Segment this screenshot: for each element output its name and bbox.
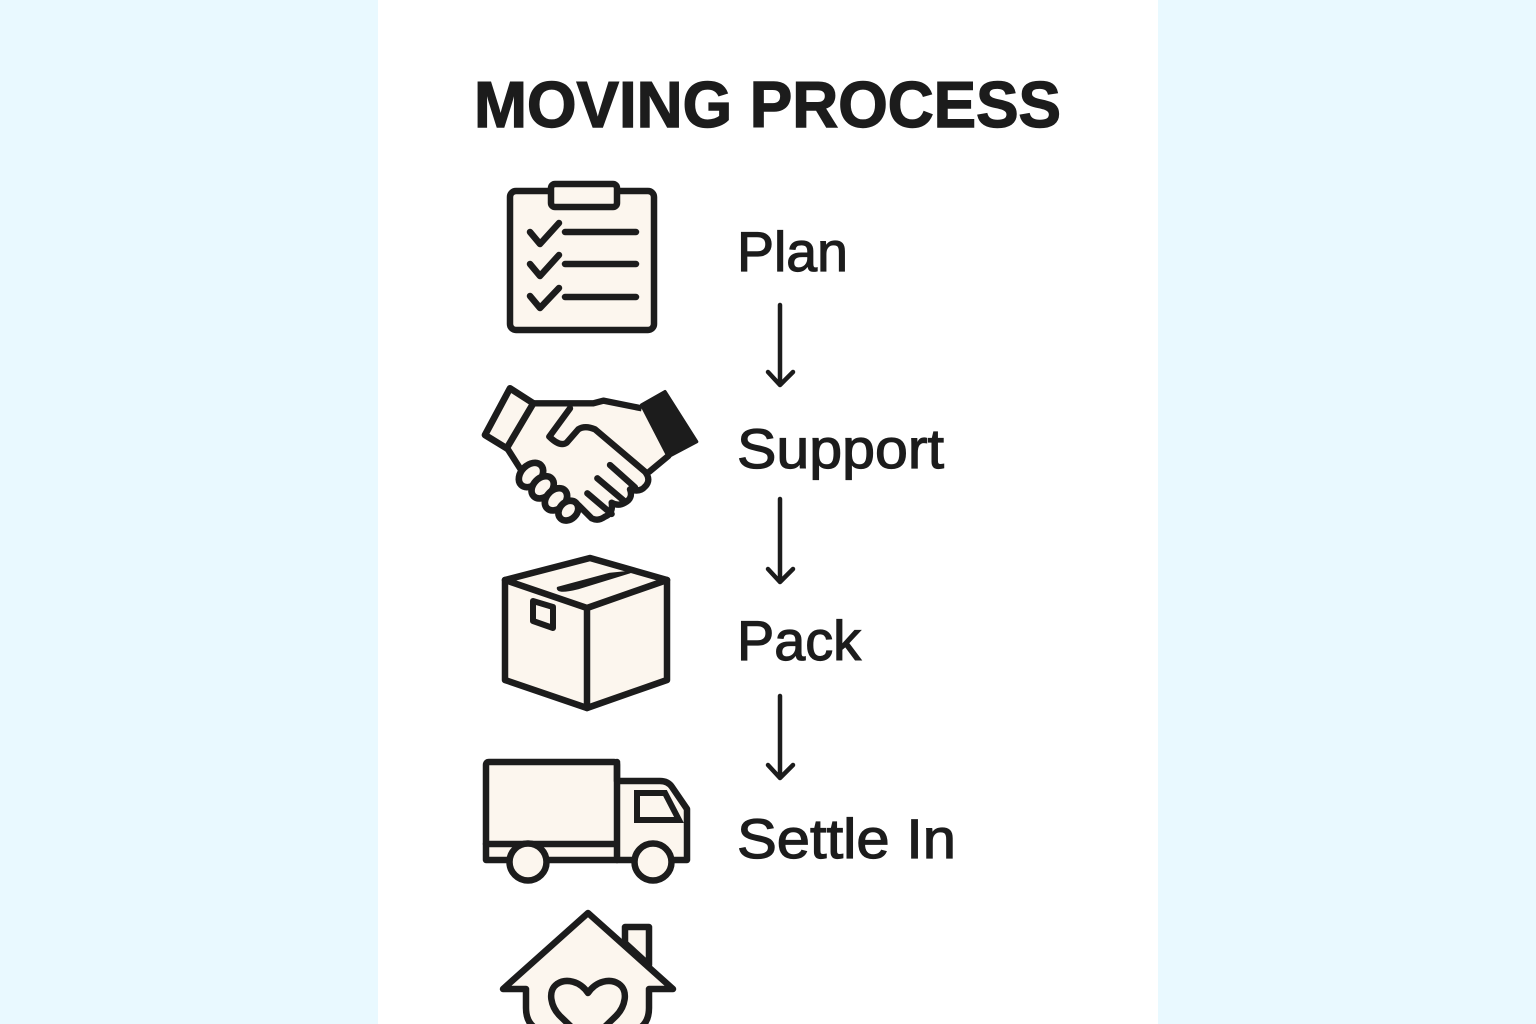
arrow: Plan to Support [768,305,793,385]
arrow: Pack to Settle In [768,696,793,778]
icon: clipboard checklist [510,184,654,330]
label: Plan: Plan [737,220,848,283]
icon: house with heart [503,913,673,1024]
panel: central white column [378,0,1158,1024]
label: Support: Support [737,417,944,480]
label: Settle In: Settle In [737,807,956,870]
icon: handshake [485,388,697,525]
arrow: Support to Pack [768,499,793,582]
title: MOVING PROCESS [474,68,1061,141]
label: Pack: Pack [737,609,862,672]
icon: moving truck [486,762,687,880]
icon: cardboard box [505,558,667,708]
